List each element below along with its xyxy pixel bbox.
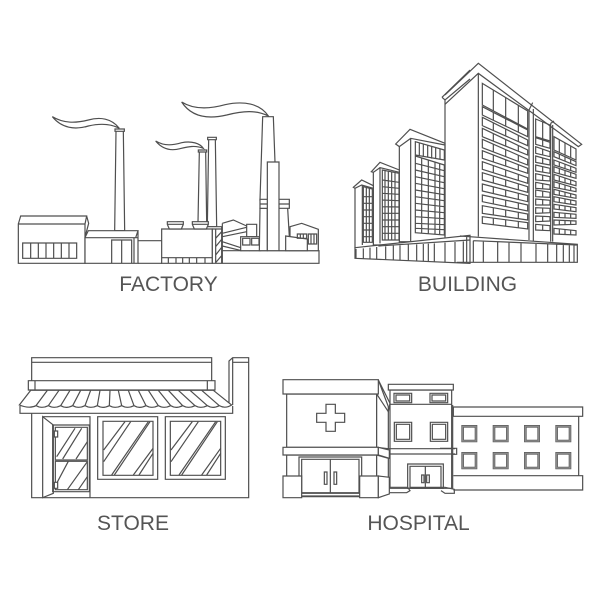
short chimney (198, 150, 207, 222)
main entrance doors (299, 457, 362, 497)
smoke plume 3 (156, 141, 203, 150)
roof (445, 63, 582, 242)
label: factory: FACTORY (119, 273, 218, 296)
main tower eave (442, 70, 470, 100)
left towers and plinth (353, 70, 470, 263)
connecting wall (138, 241, 162, 263)
store wall (32, 358, 249, 498)
store parapet (32, 358, 212, 381)
main tower (445, 63, 582, 262)
wing windows (462, 425, 571, 469)
illustration: factory (18, 102, 319, 263)
factory base (222, 251, 319, 263)
label: store: STORE (97, 512, 169, 535)
wing roof and walls (453, 407, 583, 490)
right factory section (156, 102, 319, 263)
sheds (222, 220, 250, 251)
annex building (85, 231, 138, 263)
hall windows (23, 243, 77, 258)
door (43, 417, 90, 498)
furnace block (162, 227, 222, 263)
tall chimney (207, 137, 217, 227)
smoke plume 2 (182, 102, 268, 117)
main tower left wall (444, 100, 446, 237)
wing 1 windows (482, 82, 528, 230)
middle block (388, 384, 455, 493)
chimney 1 (115, 129, 125, 231)
tower 3 (396, 129, 445, 242)
main and middle blocks (283, 380, 455, 498)
main hall (18, 216, 89, 263)
smoke plume 1 (52, 117, 119, 128)
striped awning (19, 390, 232, 407)
main block (283, 380, 390, 498)
tower 1 windows (363, 187, 372, 242)
window 2 (165, 417, 225, 479)
label: building: BUILDING (418, 273, 517, 296)
tower 1 (353, 180, 373, 248)
wing 3 windows (554, 135, 576, 235)
wing 2 windows (536, 118, 550, 232)
left factory section (18, 117, 162, 263)
illustration: building (353, 63, 582, 263)
awning valance (20, 406, 233, 413)
right wing (440, 405, 583, 490)
furnace vents (167, 222, 208, 229)
annex door (112, 238, 134, 263)
plinth (355, 235, 470, 263)
middle entrance (408, 464, 443, 488)
tower 3 windows (415, 142, 444, 235)
junction wall (440, 405, 457, 489)
illustration: hospital (283, 380, 583, 498)
label: hospital: HOSPITAL (367, 512, 470, 535)
awning band (28, 381, 215, 390)
hatched column (212, 229, 222, 263)
tower 2 (371, 162, 399, 245)
ground floor shopfront (457, 236, 577, 262)
tower 2 windows (382, 170, 399, 240)
window 1 (98, 417, 158, 479)
right shed (290, 223, 318, 251)
big chimney (259, 117, 275, 251)
medical cross (317, 404, 345, 431)
illustration: store (19, 358, 249, 498)
